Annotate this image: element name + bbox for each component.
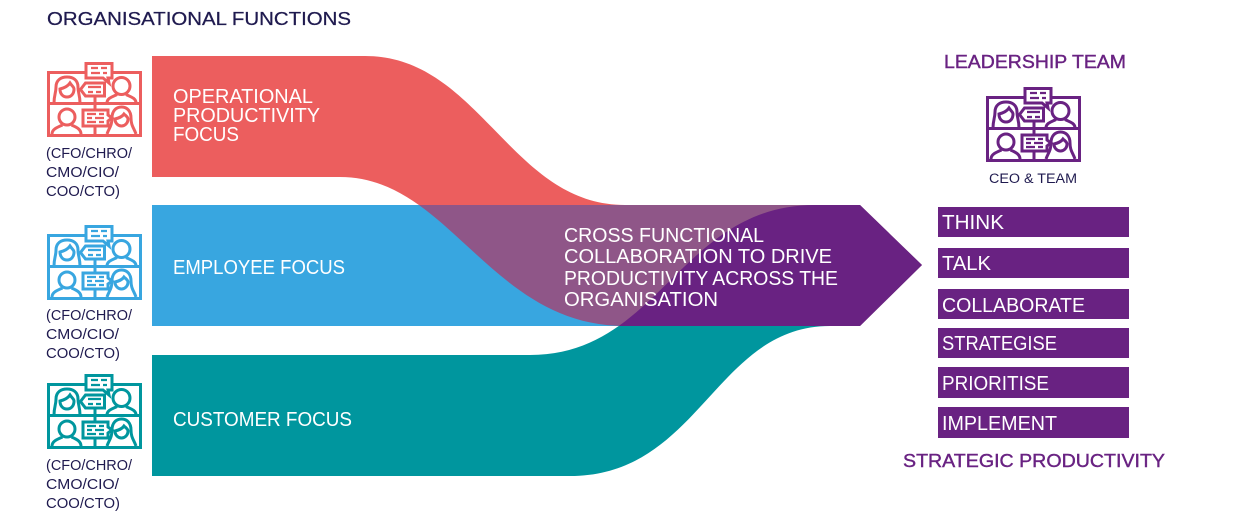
list item: talk xyxy=(938,248,1129,278)
caption: red team roles: COO/CTO) xyxy=(46,184,120,200)
text: cross functional collaboration: COLLABORATION TO DRIVE xyxy=(564,246,832,268)
list item: collaborate xyxy=(938,289,1129,319)
list item: collaborate: COLLABORATE xyxy=(942,295,1085,317)
list item: strategise xyxy=(938,328,1129,358)
caption: blue team roles xyxy=(46,308,133,362)
label: operational productivity focus: PRODUCTIVITY xyxy=(173,105,320,127)
caption: blue team roles: (CFO/CHRO/ xyxy=(46,308,133,324)
caption: ceo and team: CEO & TEAM xyxy=(989,171,1077,186)
label: employee focus: EMPLOYEE FOCUS xyxy=(173,257,345,279)
caption: teal team roles: (CFO/CHRO/ xyxy=(46,458,133,474)
list item: talk: TALK xyxy=(942,253,992,275)
label: customer focus: CUSTOMER FOCUS xyxy=(173,409,352,431)
text: cross functional collaboration: CROSS FUNCTIONAL xyxy=(564,225,764,247)
list item: strategise: STRATEGISE xyxy=(942,333,1057,355)
heading: strategic productivity: STRATEGIC PRODUCTIVITY xyxy=(903,450,1165,471)
text: cross functional collaboration: ORGANISATION xyxy=(564,289,718,311)
title: organisational functions: ORGANISATIONAL FUNCTIONS xyxy=(47,8,351,29)
caption: red team roles: CMO/CIO/ xyxy=(46,165,120,181)
list item: implement: IMPLEMENT xyxy=(942,413,1057,435)
caption: red team roles xyxy=(46,146,133,200)
icon: red team video call xyxy=(48,64,140,136)
arrow: cross functional head xyxy=(618,205,922,326)
caption: blue team roles: COO/CTO) xyxy=(46,346,120,362)
caption: teal team roles: COO/CTO) xyxy=(46,496,120,512)
text: cross functional collaboration: PRODUCTIVITY ACROSS THE xyxy=(564,268,838,290)
flow band: operational productivity focus xyxy=(152,56,700,326)
icon: teal team video call xyxy=(48,376,140,448)
label: operational productivity focus xyxy=(173,86,320,146)
icon: blue team video call xyxy=(48,226,140,298)
heading: leadership team: LEADERSHIP TEAM xyxy=(944,51,1126,72)
icon: purple leadership video call xyxy=(988,88,1080,160)
label: operational productivity focus: FOCUS xyxy=(173,124,239,146)
list item: think: THINK xyxy=(942,212,1005,234)
list item: prioritise: PRIORITISE xyxy=(942,373,1049,395)
flow band: customer focus xyxy=(152,205,860,476)
caption: blue team roles: CMO/CIO/ xyxy=(46,327,120,343)
list item: think xyxy=(938,207,1129,237)
flow band: employee focus xyxy=(152,205,652,326)
caption: teal team roles: CMO/CIO/ xyxy=(46,477,120,493)
list item: implement xyxy=(938,407,1129,438)
text: cross functional collaboration xyxy=(564,225,838,311)
label: operational productivity focus: OPERATIONAL xyxy=(173,86,313,108)
caption: teal team roles xyxy=(46,458,133,512)
arrow: blended red and blue overlap xyxy=(419,205,922,326)
list item: prioritise xyxy=(938,367,1129,398)
caption: red team roles: (CFO/CHRO/ xyxy=(46,146,133,162)
